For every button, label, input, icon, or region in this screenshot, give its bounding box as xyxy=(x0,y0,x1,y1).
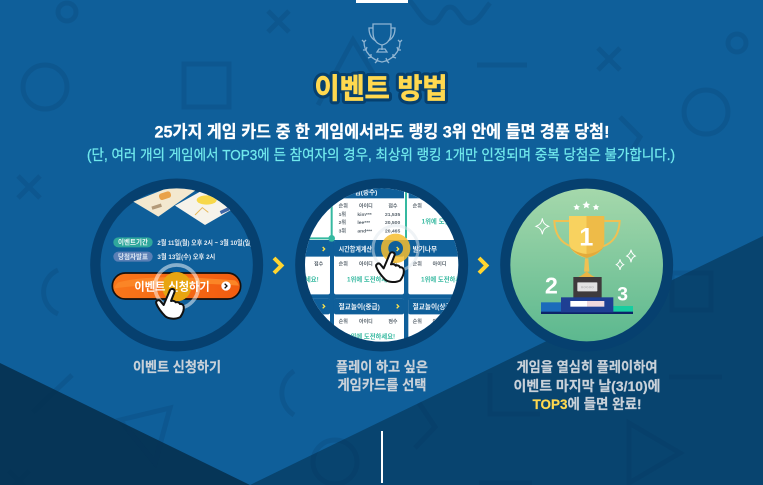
title: 이벤트 방법 xyxy=(314,73,448,104)
game cards: 3위 xyxy=(339,227,346,234)
game cards: 아이디 xyxy=(359,260,373,267)
game cards: 점수 xyxy=(388,318,398,325)
rank numbers: 2 xyxy=(545,272,558,298)
game cards: 순위 xyxy=(339,202,348,209)
game cards: 20,465 xyxy=(385,228,400,234)
game cards: 아이디 xyxy=(433,318,447,325)
stars xyxy=(573,201,599,210)
teal grid xyxy=(310,192,407,240)
caption step 3: TOP3에 들면 완료! xyxy=(532,396,642,412)
game cards xyxy=(305,188,458,342)
game cards: 세요! xyxy=(305,274,319,283)
rank numbers xyxy=(545,272,628,305)
caption step 3: 게임을 열심히 플레이하여 xyxy=(516,359,658,375)
top white bar xyxy=(356,0,408,3)
game cards: 1위에 도전하세요! xyxy=(347,274,395,283)
trophy: ○○○○○ xyxy=(581,284,594,289)
podium xyxy=(541,297,633,314)
game cards: 21,535 xyxy=(385,212,400,218)
caption step 3: 이벤트 마지막 날(3/10)에 xyxy=(514,378,660,394)
icon: hand cursor xyxy=(156,289,184,319)
game cards: 2위 xyxy=(339,219,346,226)
game cards: 발기나무 xyxy=(413,244,437,253)
game cards: 절교놀이(중급) xyxy=(339,302,380,311)
game cards: 절교놀이(상급) xyxy=(413,302,454,311)
caption step 3 xyxy=(514,359,660,412)
step 3 circle xyxy=(505,184,668,346)
game cards: 순위 xyxy=(339,318,348,325)
sparkles xyxy=(536,218,635,270)
caption step 2: 게임카드를 선택 xyxy=(338,377,426,393)
game cards: 점수 xyxy=(314,260,324,267)
game cards: 아이디 xyxy=(359,318,373,325)
game cards: 아이디 xyxy=(359,202,373,209)
game cards: lee*** xyxy=(357,220,370,226)
step 1 circle xyxy=(95,184,258,346)
caption step 2 xyxy=(336,359,428,393)
game cards: 순위 xyxy=(413,202,422,209)
game cards: 점수 xyxy=(388,202,398,209)
caption step 1: 이벤트 신청하기 xyxy=(133,359,221,375)
period labels: 이벤트기간 xyxy=(118,238,148,247)
game cards: 1위에 도전하세요 xyxy=(422,217,468,226)
game cards: 1위 xyxy=(339,211,346,218)
icon: hand cursor xyxy=(376,252,404,282)
period labels: 당첨자발표 xyxy=(118,252,148,261)
game cards: 순위 xyxy=(413,318,422,325)
game cards: 아이디 xyxy=(433,260,447,267)
period labels: 2월 11일(월) 오후 2시 ~ 3월 10일(일) xyxy=(157,238,252,247)
event page cards xyxy=(134,188,230,225)
icon: trophy with laurel xyxy=(362,24,402,63)
game cards: 시간합계계산 xyxy=(339,244,372,253)
button: 이벤트 신청하기 xyxy=(134,279,210,293)
click ring xyxy=(373,226,418,271)
game cards: 1위에 도전하세요 xyxy=(421,274,467,283)
game cards: 순위 xyxy=(339,260,348,267)
caption step 2: 플레이 하고 싶은 xyxy=(336,359,428,375)
game cards: 점수 xyxy=(388,260,398,267)
title: 이벤트 방법 xyxy=(314,73,448,104)
arrow xyxy=(479,258,486,273)
trophy: 1 xyxy=(579,224,593,252)
game cards: 20,500 xyxy=(385,220,400,226)
note: (단, 여러 개의 게임에서 TOP3에 든 참여자의 경우, 최상위 랭킹 1개만 인정되며 중복 당첨은 불가합니다.) xyxy=(87,147,675,164)
bottom white line xyxy=(381,431,383,483)
subtitle: 25가지 게임 카드 중 한 게임에서라도 랭킹 3위 안에 들면 경품 당첨! xyxy=(154,122,610,142)
game cards: kim*** xyxy=(357,212,372,218)
arrow xyxy=(274,258,282,273)
trophy xyxy=(554,216,620,298)
period labels: 3월 13일(수) 오후 2시 xyxy=(157,252,215,261)
step 2 circle xyxy=(297,182,468,348)
game cards: 순위 xyxy=(413,260,422,267)
game cards: and*** xyxy=(357,228,372,234)
game cards: 1위에 도전하세요! xyxy=(347,331,395,340)
period labels xyxy=(113,237,252,262)
game cards: 임(중수) xyxy=(355,187,377,196)
rank numbers: 3 xyxy=(617,284,628,305)
